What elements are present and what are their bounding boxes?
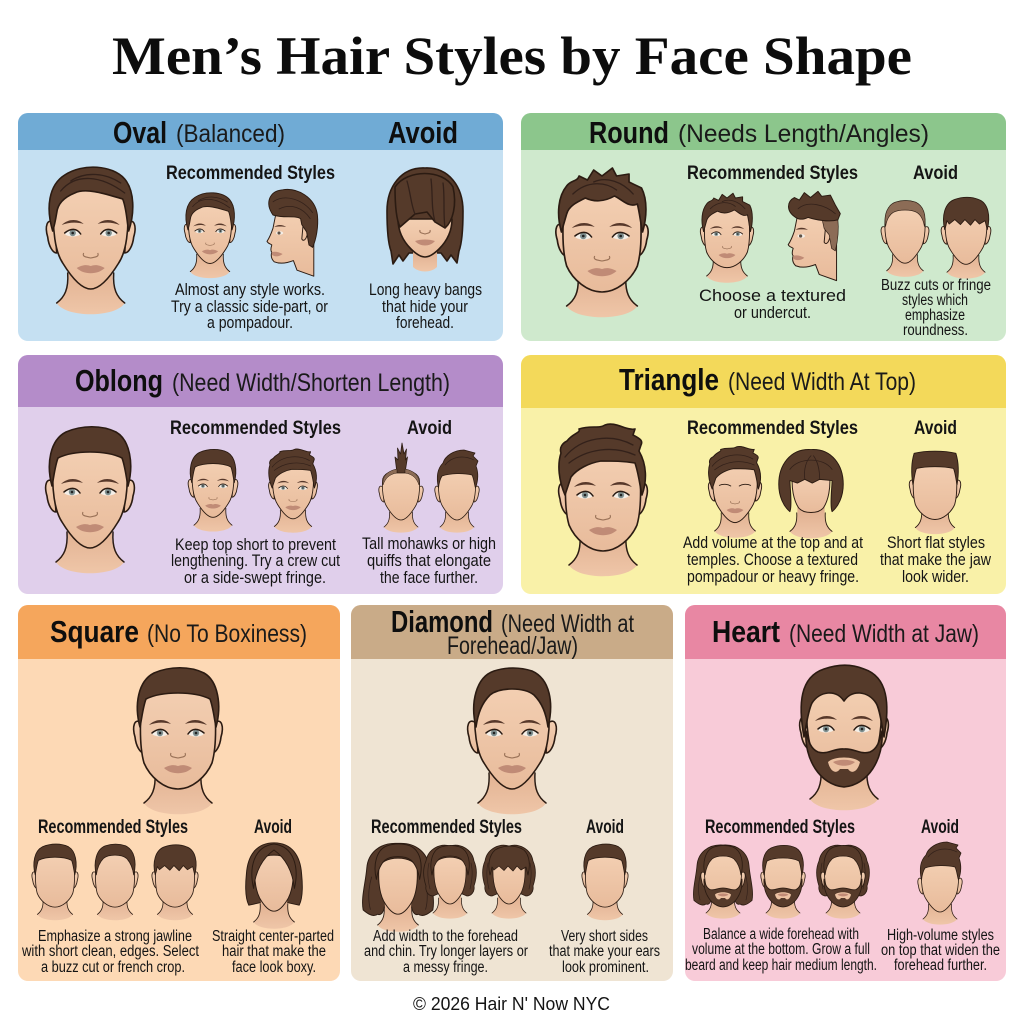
subheading: avoid: Avoid <box>254 816 292 838</box>
icon: fringe <box>941 197 991 278</box>
text: avoid: that make your ears <box>549 943 660 960</box>
icon: heavy fringe <box>779 449 843 538</box>
icon: mohawk <box>379 443 423 533</box>
panel: heart <box>685 605 1006 981</box>
text: avoid <box>881 277 991 339</box>
heading: heart <box>712 614 979 649</box>
icon: high-volume style <box>918 842 962 925</box>
face: heart with beard <box>800 665 888 810</box>
text: avoid: Long heavy bangs <box>369 280 482 299</box>
face: round <box>556 168 648 317</box>
text: avoid: Straight center-parted <box>212 928 334 945</box>
text: recommended: or undercut. <box>734 303 811 322</box>
text: avoid <box>881 927 1000 974</box>
face: square <box>134 668 222 814</box>
text: avoid: that make the jaw <box>880 550 992 569</box>
text: avoid: hair that make the <box>222 943 326 960</box>
heading: round: (Needs Length/Angles) <box>678 120 929 148</box>
icon: buzz cut <box>32 844 78 920</box>
text: recommended: a pompadour. <box>207 313 293 332</box>
heading: round <box>589 115 929 150</box>
text: recommended: Add width to the forehead <box>373 928 518 945</box>
text: recommended: with short clean, edges. Select <box>21 943 200 960</box>
heading: diamond: Forehead/Jaw) <box>447 632 578 660</box>
heading: heart: Heart <box>712 614 780 649</box>
heading: triangle: Triangle <box>619 362 719 397</box>
subheading: recommended styles: Recommended Styles <box>705 816 855 838</box>
subheading: recommended styles: Recommended Styles <box>687 417 858 439</box>
subheading: recommended styles: Recommended Styles <box>38 816 188 838</box>
icon: longer layers <box>363 843 433 932</box>
icon: medium hair with beard <box>761 845 805 919</box>
subheading: avoid: Avoid <box>914 417 957 439</box>
text: recommended <box>171 280 328 332</box>
text: avoid: look wider. <box>902 567 969 586</box>
icon: crew cut <box>188 449 238 532</box>
text: avoid: forehead further. <box>894 957 987 974</box>
heading: heart: (Need Width at Jaw) <box>789 620 979 648</box>
text: avoid: Short flat styles <box>887 533 985 552</box>
text: recommended: Keep top short to prevent <box>175 535 336 554</box>
text: avoid: roundness. <box>903 322 968 339</box>
panel: triangle <box>521 355 1006 594</box>
icon: classic side part <box>184 193 236 278</box>
text: avoid <box>362 534 496 587</box>
heading: square <box>50 614 307 649</box>
heading: oval: (Balanced) <box>176 120 285 148</box>
text: avoid <box>212 928 334 976</box>
text: avoid <box>880 533 992 586</box>
icon: high quiff <box>435 450 479 533</box>
icon: very short sides <box>582 844 628 920</box>
title: Men’s Hair Styles by Face Shape <box>112 26 912 86</box>
heading: square: (No To Boxiness) <box>147 620 307 648</box>
text: avoid: quiffs that elongate <box>367 551 491 570</box>
text: avoid <box>549 928 660 976</box>
text: avoid: emphasize <box>905 307 965 324</box>
icon: side-swept fringe <box>269 449 317 533</box>
text: recommended: Choose a textured <box>699 286 846 305</box>
icon: center-parted hair <box>246 843 302 929</box>
icon: long hair with beard <box>693 845 753 919</box>
heading: round: Round <box>589 115 669 150</box>
text: recommended <box>171 535 340 587</box>
text: recommended: Balance a wide forehead with <box>703 926 859 943</box>
subheading: recommended styles: Recommended Styles <box>170 417 341 439</box>
text: recommended <box>685 926 877 974</box>
subheading: avoid: Avoid <box>407 417 452 439</box>
text: avoid: Tall mohawks or high <box>362 534 496 553</box>
panel: round <box>521 113 1006 341</box>
text: avoid: on top that widen the <box>881 942 1000 959</box>
icon: messy fringe <box>483 845 535 919</box>
heading: diamond: (Need Width at <box>501 610 634 638</box>
text: recommended: Try a classic side-part, or <box>171 297 328 316</box>
heading: diamond <box>391 604 634 660</box>
text: avoid: face look boxy. <box>232 959 316 976</box>
footer: © 2026 Hair N' Now NYC <box>413 994 610 1014</box>
subheading: avoid: Avoid <box>921 816 959 838</box>
icon: long heavy bangs <box>387 168 463 272</box>
heading: triangle <box>619 362 916 397</box>
icon: pompadour profile <box>267 189 318 276</box>
text: recommended: a messy fringe. <box>403 959 488 976</box>
text: avoid: the face further. <box>380 568 478 587</box>
subheading: avoid: Avoid <box>586 816 624 838</box>
heading: oblong: Oblong <box>75 363 163 398</box>
text: avoid: that hide your <box>382 297 468 316</box>
text: avoid: forehead. <box>396 313 454 332</box>
panel: square <box>18 605 340 981</box>
icon: undercut profile <box>788 191 840 281</box>
text: recommended <box>683 533 863 586</box>
icon: textured quiff <box>700 193 754 283</box>
heading: triangle: (Need Width At Top) <box>728 368 916 396</box>
icon: french crop <box>152 845 198 920</box>
text: avoid: look prominent. <box>562 959 649 976</box>
heading: oblong <box>75 363 450 398</box>
text: recommended: temples. Choose a textured <box>687 550 858 569</box>
face: diamond <box>468 668 556 814</box>
icon: short clean cut <box>92 844 138 920</box>
text: avoid: Very short sides <box>561 928 648 945</box>
icon: buzz cut <box>881 201 929 277</box>
heading: oval <box>113 115 285 150</box>
subheading: recommended styles: Recommended Styles <box>371 816 522 838</box>
icon: short flat style <box>909 451 961 534</box>
icon: wavy hair with beard <box>817 845 869 919</box>
icon: curly layers <box>424 845 476 919</box>
text: recommended: beard and keep hair medium length. <box>685 957 877 974</box>
heading: square: Square <box>50 614 139 649</box>
icon: textured pompadour <box>708 446 762 538</box>
subheading: recommended styles: Recommended Styles <box>166 162 335 184</box>
text: recommended: Add volume at the top and at <box>683 533 863 552</box>
heading: oval: Oval <box>113 115 167 150</box>
panel: oval <box>18 113 503 341</box>
text: avoid: Buzz cuts or fringe <box>881 277 991 294</box>
face: oblong <box>46 427 134 573</box>
text: recommended: pompadour or heavy fringe. <box>687 567 859 586</box>
text: recommended <box>699 286 846 322</box>
text: recommended: or a side-swept fringe. <box>184 568 326 587</box>
subheading: avoid: Avoid <box>913 162 958 184</box>
text: recommended: and chin. Try longer layers or <box>364 943 528 960</box>
text: avoid: styles which <box>902 292 968 309</box>
heading: avoid: Avoid <box>388 115 458 150</box>
text: avoid: High-volume styles <box>887 927 994 944</box>
text: recommended <box>364 928 528 976</box>
panel: diamond <box>351 604 673 981</box>
text: recommended: Emphasize a strong jawline <box>38 928 192 945</box>
text: avoid <box>369 280 482 332</box>
text: recommended: volume at the bottom. Grow a full <box>692 941 870 958</box>
text: recommended: a buzz cut or french crop. <box>41 959 185 976</box>
face: oval <box>46 167 135 314</box>
text: recommended: lengthening. Try a crew cut <box>171 551 340 570</box>
heading: oblong: (Need Width/Shorten Length) <box>172 369 450 397</box>
text: recommended: Almost any style works. <box>175 280 325 299</box>
text: recommended <box>21 928 200 976</box>
heading: diamond: Diamond <box>391 604 493 639</box>
panel: oblong <box>18 355 503 594</box>
subheading: recommended styles: Recommended Styles <box>687 162 858 184</box>
face: triangle <box>559 424 647 576</box>
